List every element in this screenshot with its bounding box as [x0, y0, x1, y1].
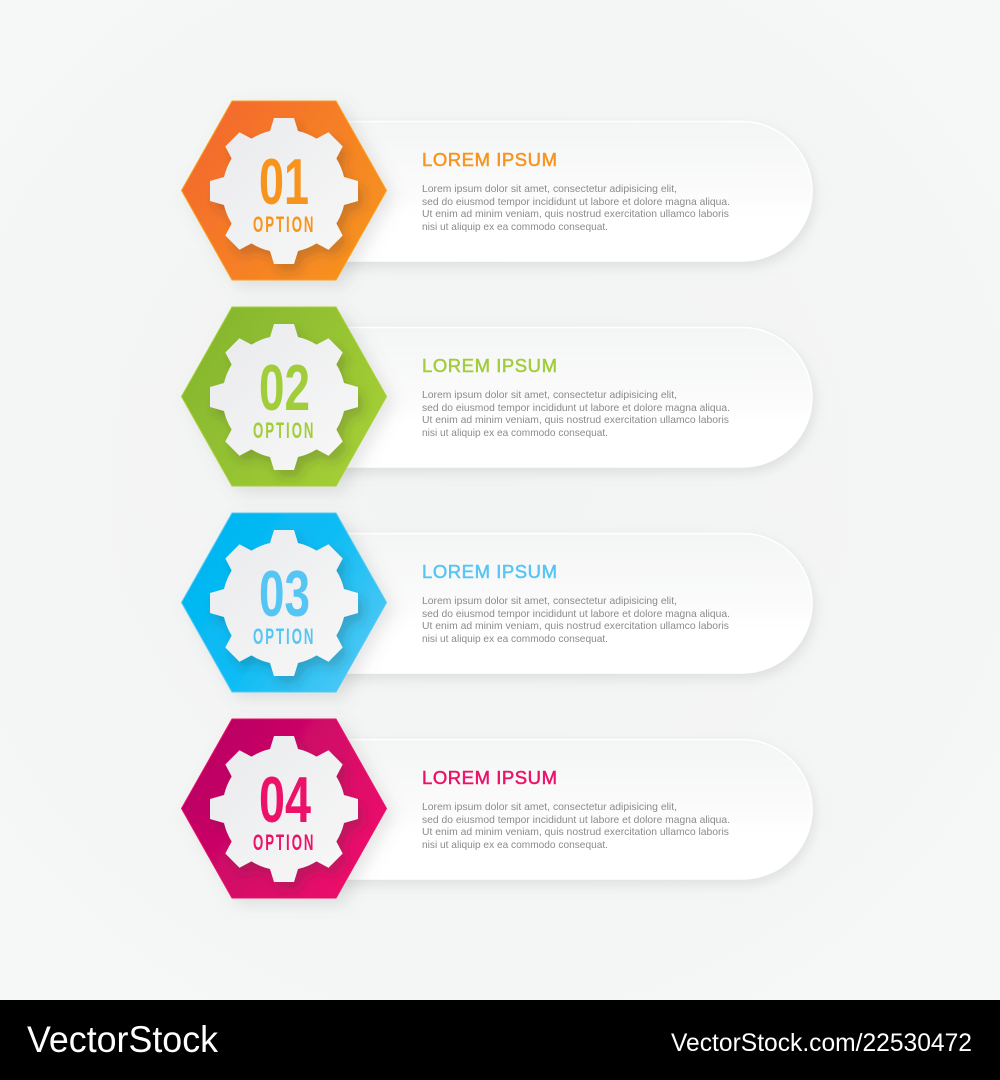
text block 04: Ut enim ad minim veniam, quis nostrud exercitation ullamco laboris: [422, 826, 729, 838]
text block 03: sed do eiusmod tempor incididunt ut labore et dolore magna aliqua.: [422, 608, 730, 620]
footer logo text: VectorStock: [27, 1019, 218, 1060]
number 01: 01: [259, 145, 309, 218]
text block 02: Ut enim ad minim veniam, quis nostrud exercitation ullamco laboris: [422, 414, 729, 426]
text block 01: nisi ut aliquip ex ea commodo consequat.: [422, 221, 608, 233]
text block 03: [422, 595, 730, 645]
text block 01: sed do eiusmod tempor incididunt ut labore et dolore magna aliqua.: [422, 196, 730, 208]
text block 01: Lorem ipsum dolor sit amet, consectetur adipisicing elit,: [422, 183, 677, 195]
text block 02: Lorem ipsum dolor sit amet, consectetur adipisicing elit,: [422, 389, 677, 401]
text block 04: Lorem ipsum dolor sit amet, consectetur adipisicing elit,: [422, 801, 677, 813]
option row 04: [182, 719, 812, 898]
number 03: 03: [259, 557, 310, 630]
text block 01: [422, 183, 730, 233]
option row 01: [182, 101, 812, 280]
text block 03: nisi ut aliquip ex ea commodo consequat.: [422, 633, 608, 645]
hexagon: option 03: [182, 513, 386, 692]
option row 02: [182, 307, 812, 486]
label: option 01: OPTION: [253, 213, 315, 237]
panel: option 04: [250, 740, 812, 879]
text block 03: Lorem ipsum dolor sit amet, consectetur adipisicing elit,: [422, 595, 677, 607]
heading 03: LOREM IPSUM: [422, 561, 557, 582]
icon: gear 04: [210, 736, 358, 882]
heading 02: LOREM IPSUM: [422, 355, 557, 376]
text block 01: Ut enim ad minim veniam, quis nostrud exercitation ullamco laboris: [422, 208, 729, 220]
number 04: 04: [259, 763, 311, 836]
panel: option 01: [250, 122, 812, 261]
hexagon: option 04: [182, 719, 386, 898]
icon: gear 01: [210, 118, 358, 264]
label: option 04: OPTION: [253, 831, 315, 855]
text block 02: sed do eiusmod tempor incididunt ut labore et dolore magna aliqua.: [422, 402, 730, 414]
heading 04: LOREM IPSUM: [422, 767, 557, 788]
text block 02: nisi ut aliquip ex ea commodo consequat.: [422, 427, 608, 439]
panel: option 02: [250, 328, 812, 467]
panel: option 03: [250, 534, 812, 673]
footer bar: [0, 1000, 1000, 1080]
text block 04: sed do eiusmod tempor incididunt ut labore et dolore magna aliqua.: [422, 814, 730, 826]
text block 03: Ut enim ad minim veniam, quis nostrud exercitation ullamco laboris: [422, 620, 729, 632]
label: option 02: OPTION: [253, 419, 315, 443]
icon: gear 02: [210, 324, 358, 470]
text block 04: [422, 801, 730, 851]
label: option 03: OPTION: [253, 625, 315, 649]
text block 02: [422, 389, 730, 439]
hexagon: option 01: [182, 101, 386, 280]
heading 01: LOREM IPSUM: [422, 149, 557, 170]
hexagon: option 02: [182, 307, 386, 486]
number 02: 02: [259, 351, 310, 424]
icon: gear 03: [210, 530, 358, 676]
text block 04: nisi ut aliquip ex ea commodo consequat.: [422, 839, 608, 851]
footer image id: VectorStock.com/22530472: [671, 1029, 972, 1057]
option row 03: [182, 513, 812, 692]
